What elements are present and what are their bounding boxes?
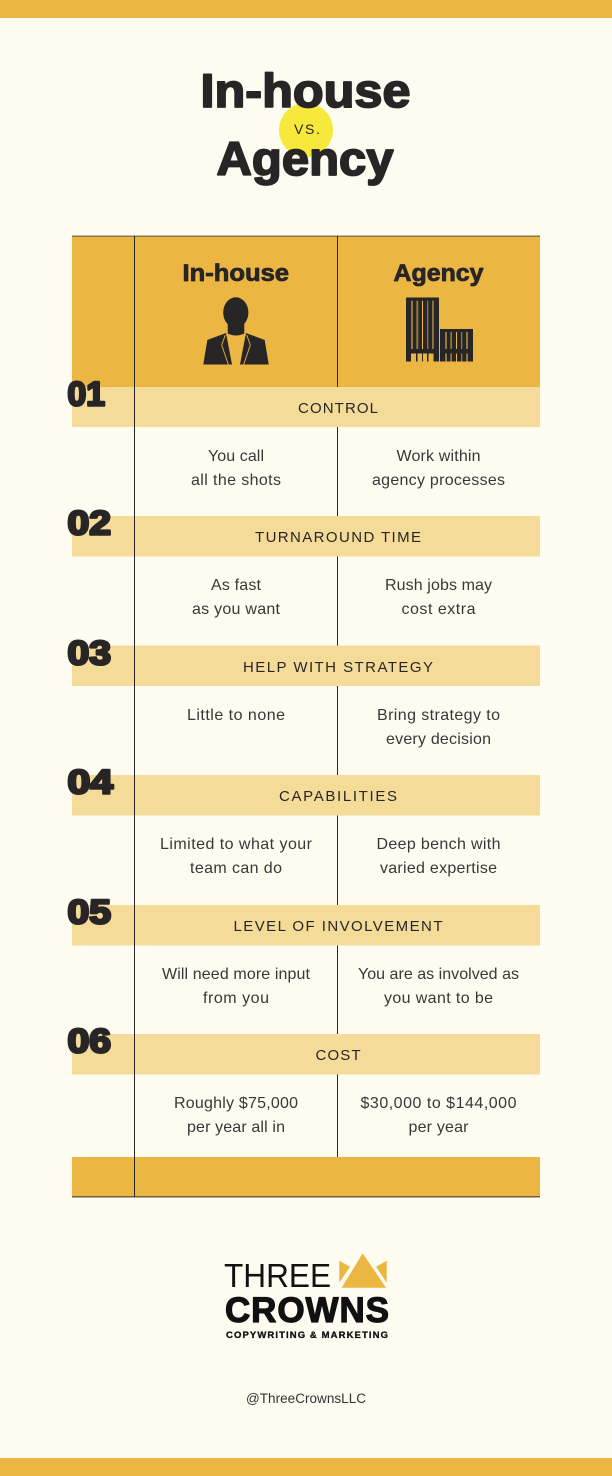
logo word: CROWNS: CROWNS [225, 1291, 389, 1330]
row label: HELP WITH STRATEGY [243, 659, 433, 676]
icon: crown [339, 1253, 387, 1288]
row 05: level of involvement [72, 905, 540, 1007]
row label: LEVEL OF INVOLVEMENT [234, 918, 442, 935]
icon: office buildings [406, 298, 473, 362]
column heading: In-house: In-house [182, 260, 289, 287]
logo: Three Crowns [224, 1253, 389, 1341]
in-house cell [174, 1095, 298, 1136]
agency cell [372, 448, 505, 489]
column heading: Agency: Agency [394, 260, 484, 287]
in-house cell: Will need more input [162, 966, 311, 983]
band [72, 775, 540, 816]
agency cell [385, 577, 492, 618]
in-house cell: team can do [190, 860, 282, 877]
in-house cell: as you want [192, 601, 281, 618]
agency cell: per year [408, 1119, 469, 1136]
row label: CAPABILITIES [279, 788, 397, 805]
in-house cell: from you [203, 990, 269, 1007]
agency cell: $30,000 to $144,000 [360, 1095, 517, 1112]
number 05: 05 [68, 894, 111, 932]
number 01: 01 [68, 376, 105, 414]
number 02: 02 [68, 504, 111, 542]
in-house cell: As fast [211, 577, 262, 594]
title line: Agency: Agency [216, 132, 394, 185]
logo word: THREE: THREE [224, 1257, 331, 1294]
row label: TURNAROUND TIME [255, 529, 421, 546]
number 04: 04 [68, 764, 113, 802]
number 06: 06 [68, 1022, 111, 1060]
number 03: 03 [68, 634, 111, 672]
row 01: control [72, 387, 540, 489]
agency cell: cost extra [402, 601, 476, 618]
row label: CONTROL [298, 400, 378, 417]
agency cell: varied expertise [380, 860, 497, 877]
in-house cell: per year all in [187, 1119, 285, 1136]
agency cell: Deep bench with [376, 836, 500, 853]
agency cell: every decision [386, 731, 491, 748]
bottom bar [0, 1458, 612, 1476]
agency cell: You are as involved as [358, 966, 519, 983]
icon: person in suit [203, 297, 269, 364]
band [72, 646, 540, 686]
title [200, 64, 410, 185]
footer band of table [72, 1157, 540, 1198]
in-house cell [192, 577, 281, 618]
agency cell [360, 1095, 517, 1136]
comparison table [68, 236, 540, 1198]
agency cell: you want to be [384, 990, 493, 1007]
in-house cell [191, 448, 281, 489]
row label: COST [316, 1047, 360, 1064]
logo tagline: COPYWRITING & MARKETING [226, 1330, 388, 1341]
agency cell [358, 966, 519, 1007]
in-house cell: Limited to what your [160, 836, 313, 853]
row 03: help with strategy [72, 646, 540, 748]
row 04: capabilities [72, 775, 540, 877]
agency cell [377, 707, 500, 748]
agency cell [376, 836, 500, 877]
in-house cell [160, 836, 313, 877]
top bar [0, 0, 612, 18]
in-house cell: all the shots [191, 472, 281, 489]
in-house cell: Roughly $75,000 [174, 1095, 298, 1112]
band [72, 1034, 540, 1074]
in-house cell: You call [208, 448, 264, 465]
agency cell: Bring strategy to [377, 707, 500, 724]
row 02: turnaround time [72, 516, 540, 618]
in-house cell: Little to none [187, 707, 285, 724]
agency cell: Work within [396, 448, 480, 465]
agency cell: agency processes [372, 472, 505, 489]
band [72, 905, 540, 946]
band [72, 516, 540, 556]
row 06: cost [72, 1034, 540, 1136]
vs. circle [279, 103, 333, 157]
social handle: @ThreeCrownsLLC [246, 1391, 366, 1406]
title line: In-house: In-house [200, 64, 410, 117]
band [72, 387, 540, 427]
in-house cell [162, 966, 311, 1007]
vs. label: VS. [294, 121, 320, 137]
agency cell: Rush jobs may [385, 577, 492, 594]
table header panel [72, 236, 540, 387]
